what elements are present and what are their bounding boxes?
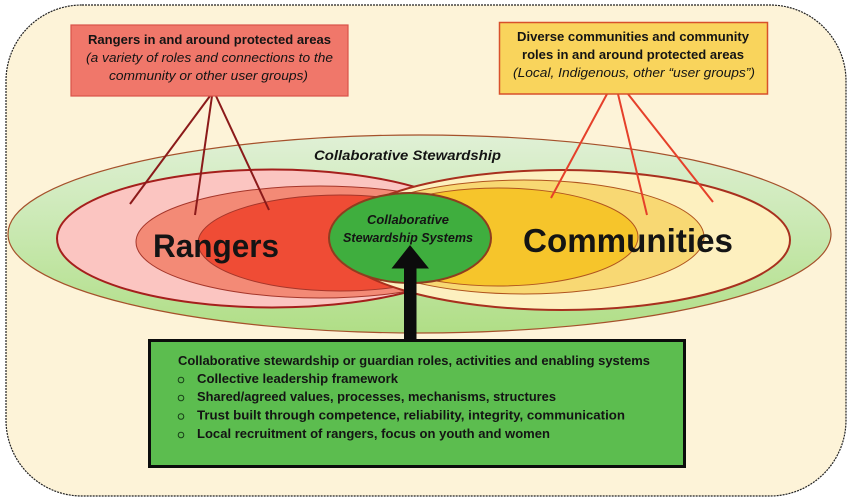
bullet list: Collective leadership framework bbox=[197, 371, 399, 386]
panel: communities description: roles in and around protected areas bbox=[522, 47, 744, 62]
panel: collaborative stewardship roles bbox=[150, 340, 684, 466]
panel: rangers description bbox=[71, 25, 348, 96]
label: collaborative stewardship systems: Stewardship Systems bbox=[343, 230, 473, 245]
connector lines: communities bbox=[551, 94, 713, 215]
ellipses: communities bbox=[334, 170, 790, 310]
panel: communities description: (Local, Indigenous, other “user groups”) bbox=[513, 65, 755, 80]
bullet list: Local recruitment of rangers, focus on youth and women bbox=[197, 426, 550, 441]
venn diagram bbox=[8, 135, 831, 333]
heading: Collaborative stewardship or guardian roles, activities and enabling systems bbox=[178, 353, 650, 368]
panel: rangers description: Rangers in and around protected areas bbox=[88, 32, 331, 47]
bullet list bbox=[178, 371, 625, 441]
panel: rangers description: (a variety of roles and connections to the bbox=[86, 50, 333, 65]
ellipses: rangers bbox=[57, 170, 504, 308]
label: collaborative stewardship: Collaborative Stewardship bbox=[314, 148, 501, 163]
panel: communities description: Diverse communities and community bbox=[517, 29, 750, 44]
arrow bbox=[392, 245, 429, 341]
bullet list: Trust built through competence, reliability, integrity, communication bbox=[197, 408, 625, 422]
label: collaborative stewardship systems bbox=[343, 212, 473, 245]
panel: communities description bbox=[500, 22, 768, 94]
ellipse: collaborative stewardship bbox=[8, 135, 831, 333]
connector lines: rangers bbox=[130, 96, 269, 215]
label: collaborative stewardship systems: Collaborative bbox=[367, 212, 449, 227]
panel: rangers description: community or other user groups) bbox=[109, 68, 308, 83]
label: rangers: Rangers bbox=[153, 228, 279, 264]
bullet list: Shared/agreed values, processes, mechanisms, structures bbox=[197, 389, 556, 404]
ellipse: collaborative stewardship systems bbox=[329, 193, 491, 283]
label: communities: Communities bbox=[523, 222, 733, 259]
